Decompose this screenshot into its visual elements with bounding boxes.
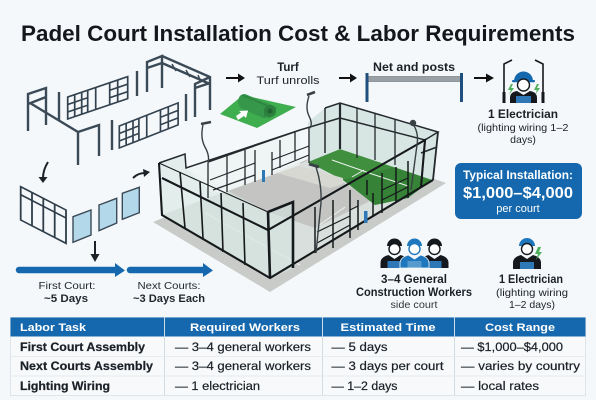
table row: first court assembly: [20, 342, 563, 354]
icon: turf roll: [220, 94, 296, 128]
arrow: to turf: [226, 74, 245, 82]
table row: lighting wiring: Lighting Wiring: [20, 381, 110, 393]
icon: electrician: [513, 238, 542, 269]
workers label: side court: [390, 299, 438, 311]
arrow: panels to court: [133, 169, 150, 178]
court floor: [162, 149, 432, 278]
electrician label: side court: (lighting wiring: [496, 287, 568, 299]
electrician label: side court: 1–2 days): [509, 299, 555, 311]
table row: lighting wiring: — 1 electrician: [175, 381, 260, 393]
timeline arrowhead: first court: [115, 263, 125, 277]
label: first court duration: [38, 280, 96, 305]
court base platform: [153, 146, 446, 292]
table row: lighting wiring: — 1–2 days: [332, 381, 398, 393]
back wall frame: [159, 103, 438, 198]
table row: first court assembly: — 5 days: [332, 342, 388, 354]
glass panels: [73, 187, 139, 242]
table header: Required Workers: [190, 322, 300, 334]
table header: Estimated Time: [340, 322, 436, 334]
arrow: frames to windows: [38, 162, 48, 183]
electrician label: side court: 1 Electrician: [499, 274, 563, 286]
title: Padel Court Installation Cost & Labor Requirements: [21, 21, 575, 46]
window frame panel: [21, 187, 66, 243]
cost callout: [455, 163, 582, 219]
cost callout: $1,000–$4,000: [463, 185, 573, 202]
rolled turf edge: [277, 165, 343, 188]
concrete slab: [222, 166, 372, 228]
turf heading: Turf: [277, 62, 299, 74]
timeline arrowhead: next courts: [203, 263, 213, 277]
electrician label: [478, 109, 569, 146]
label: next courts duration: Next Courts:: [138, 280, 200, 292]
table row: first court assembly: — $1,000–$4,000: [461, 342, 563, 354]
padel court: [153, 92, 446, 292]
steel frame pieces: [28, 56, 210, 165]
electrician label: 1 Electrician: [488, 109, 558, 121]
electrician label: days): [510, 134, 536, 146]
label: first court duration: ~5 Days: [44, 293, 88, 305]
workers label: 3–4 General: [381, 274, 447, 286]
label: next courts duration: ~3 Days Each: [133, 293, 205, 305]
turf surface: [308, 149, 432, 205]
court lines: [205, 160, 408, 265]
label: first court duration: First Court:: [38, 280, 96, 292]
table row: lighting wiring: [20, 381, 539, 393]
table row: next courts assembly: — 3–4 general workers: [175, 361, 311, 373]
net posts: [262, 170, 368, 223]
net heading: Net and posts: [373, 62, 455, 74]
table row: lighting wiring: — local rates: [461, 381, 539, 393]
table row: first court assembly: First Court Assembly: [20, 342, 146, 354]
workers label: [356, 274, 472, 311]
table header: [10, 318, 586, 336]
timeline arrow: first court: [19, 267, 116, 273]
cost callout: per court: [496, 203, 540, 215]
darker turf through glass: [343, 167, 432, 205]
electrician label: (lighting wiring 1–2: [478, 122, 569, 134]
table row: first court assembly: — 3–4 general workers: [175, 342, 311, 354]
timeline arrow: next courts: [130, 267, 204, 273]
label: next courts duration: [133, 280, 205, 305]
table row: next courts assembly: — 3 days per court: [332, 361, 444, 373]
electrician label: side court: [496, 274, 568, 311]
table header: Labor Task: [20, 322, 87, 334]
cost callout: Typical Installation:: [463, 170, 573, 182]
front wall frame: [159, 140, 433, 278]
turf heading: [256, 62, 320, 87]
turf heading: Turf unrolls: [256, 75, 320, 87]
table row: next courts assembly: [20, 361, 580, 373]
icon: three construction workers: [380, 238, 448, 268]
icon: net and posts: [366, 73, 463, 102]
workers label: Construction Workers: [356, 287, 472, 299]
labor table: [10, 317, 586, 396]
arrow: to electrician: [474, 74, 494, 82]
arrow: panels down to timeline: [90, 241, 100, 262]
icon: electrician with lamps: [502, 60, 544, 103]
table header: Cost Range: [485, 322, 555, 334]
arrow: to net: [339, 74, 357, 82]
table row: next courts assembly: Next Courts Assembly: [20, 361, 154, 373]
table row: next courts assembly: — varies by country: [461, 361, 580, 373]
glass walls: [159, 103, 438, 278]
lighting poles: [201, 92, 418, 253]
